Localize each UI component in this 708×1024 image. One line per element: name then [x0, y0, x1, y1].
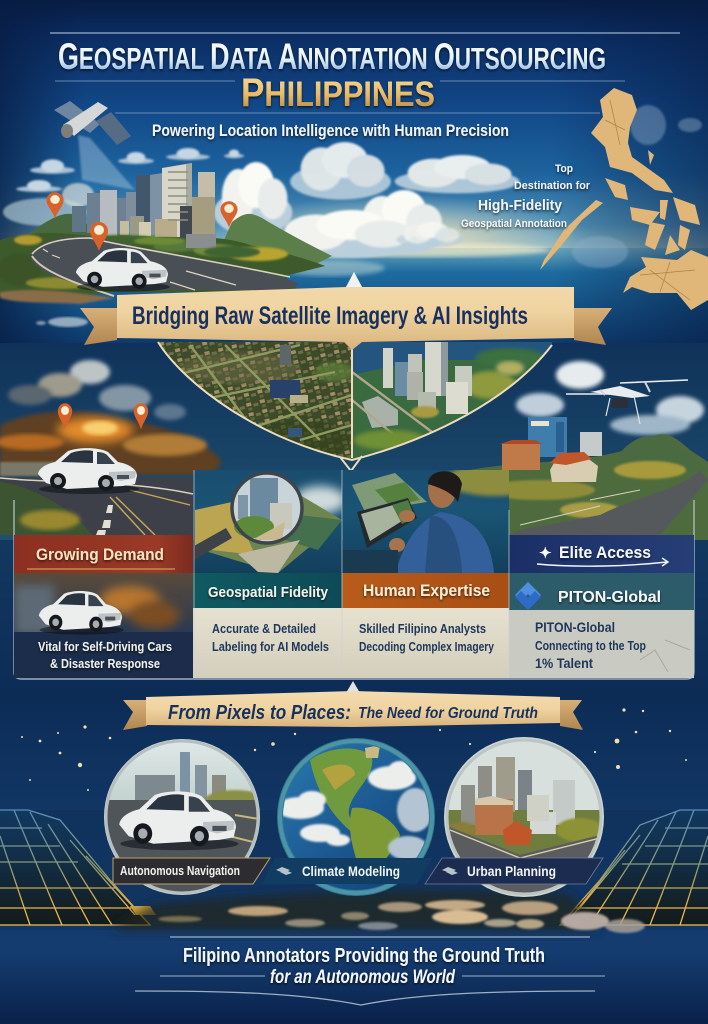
fan right: labelled 3D city	[352, 340, 556, 465]
panel: elite access: Elite Access	[559, 544, 651, 562]
map pins over fire	[58, 403, 148, 429]
icon: drone	[566, 380, 688, 424]
small drifting clouds below land	[36, 317, 88, 327]
label: climate modeling: Climate Modeling	[302, 864, 400, 879]
chevron base	[135, 991, 595, 1005]
panel frame	[14, 500, 694, 679]
earth texture band	[110, 890, 645, 933]
panel: growing demand	[14, 535, 193, 678]
closing line two: for an Autonomous World	[270, 967, 455, 988]
label: autonomous navigation: Autonomous Navigation	[120, 864, 240, 878]
circle: climate modeling globe	[276, 738, 435, 896]
panel: geospatial fidelity: Accurate & Detailed	[212, 622, 316, 636]
label: urban planning	[425, 858, 603, 884]
label: urban planning: Urban Planning	[467, 864, 556, 879]
circle: urban planning	[444, 737, 605, 897]
hero scene: sky, sea, coast and city	[0, 0, 708, 343]
icon: magnifier over map	[194, 473, 346, 573]
icon: PITON-Global diamond	[515, 582, 541, 610]
road	[30, 236, 300, 290]
title	[50, 33, 680, 115]
section banner: bridging imagery and AI	[80, 272, 612, 350]
panel: human expertise	[342, 470, 509, 678]
callout: top destination: Destination for	[514, 180, 591, 192]
label: autonomous navigation	[113, 858, 270, 884]
panel: human expertise: Skilled Filipino Analysts	[359, 622, 486, 636]
icon: car by the fire	[38, 448, 139, 494]
left grid	[0, 810, 156, 925]
subtitle: Powering Location Intelligence with Human Precision	[152, 121, 509, 140]
fan left: aerial raw imagery	[159, 342, 352, 459]
clouds	[3, 105, 702, 268]
panel: elite access: PITON-Global	[535, 620, 615, 635]
Philippines map	[540, 88, 708, 310]
fan curved edge and tip	[158, 342, 552, 471]
section banner: from pixels to places: From Pixels to Places:	[168, 702, 351, 724]
buildings campus	[528, 417, 567, 457]
panel: growing demand: Vital for Self-Driving Cars	[38, 640, 172, 654]
scene right: clouds, hills and campus	[470, 361, 708, 540]
central fan: raw imagery vs AI insight	[0, 340, 708, 540]
panel: growing demand: & Disaster Response	[50, 657, 160, 671]
circle: autonomous navigation	[100, 739, 265, 895]
callout: top destination: High-Fidelity	[478, 197, 563, 214]
panel: geospatial fidelity: Labeling for AI Models	[212, 640, 329, 654]
panel: geospatial fidelity	[193, 470, 346, 678]
scene left: smoke, fire and road	[0, 360, 222, 535]
panel: growing demand: Growing Demand	[36, 545, 164, 564]
panel: human expertise: Decoding Complex Imagery	[359, 640, 494, 654]
land	[0, 233, 325, 300]
panel: elite access: PITON-Global	[558, 589, 661, 606]
panel: elite access: ✦	[539, 545, 552, 562]
hill right	[210, 214, 332, 272]
mid section backdrop	[0, 343, 708, 540]
icon: white car on road	[76, 248, 170, 292]
hill left	[25, 214, 110, 250]
section banner: bridging imagery and AI: Bridging Raw Satellite Imagery & AI Insights	[132, 302, 528, 330]
panel: human expertise: Human Expertise	[363, 582, 490, 600]
ground truth map grids	[0, 810, 708, 930]
city buildings	[72, 163, 216, 248]
analyst at tablet	[343, 470, 509, 573]
closing line one: Filipino Annotators Providing the Ground Truth	[183, 945, 545, 967]
panel: elite access	[509, 535, 694, 678]
section banner: from pixels to places: The Need for Ground Truth	[358, 705, 538, 722]
panel: elite access: Connecting to the Top	[535, 638, 646, 653]
car and fire image	[14, 580, 193, 654]
panel: geospatial fidelity: Geospatial Fidelity	[208, 584, 329, 601]
callout: top destination: Top	[555, 163, 573, 175]
lower section starfield	[21, 708, 687, 791]
label: climate modeling	[262, 858, 432, 884]
location pins	[46, 192, 238, 251]
callout: top destination: Geospatial Annotation	[461, 218, 567, 230]
panel: elite access: 1% Talent	[535, 656, 593, 671]
four feature panels	[14, 464, 694, 679]
closing statement	[135, 937, 605, 1005]
right grid	[560, 810, 708, 925]
title line two: Philippines: PHILIPPINES	[241, 71, 435, 115]
title line one: GEOSPATIAL DATA ANNOTATION OUTSOURCING	[58, 36, 606, 77]
satellite with scan beam	[54, 101, 135, 190]
callout: top destination	[461, 163, 591, 230]
section banner: from pixels to places	[123, 681, 583, 730]
